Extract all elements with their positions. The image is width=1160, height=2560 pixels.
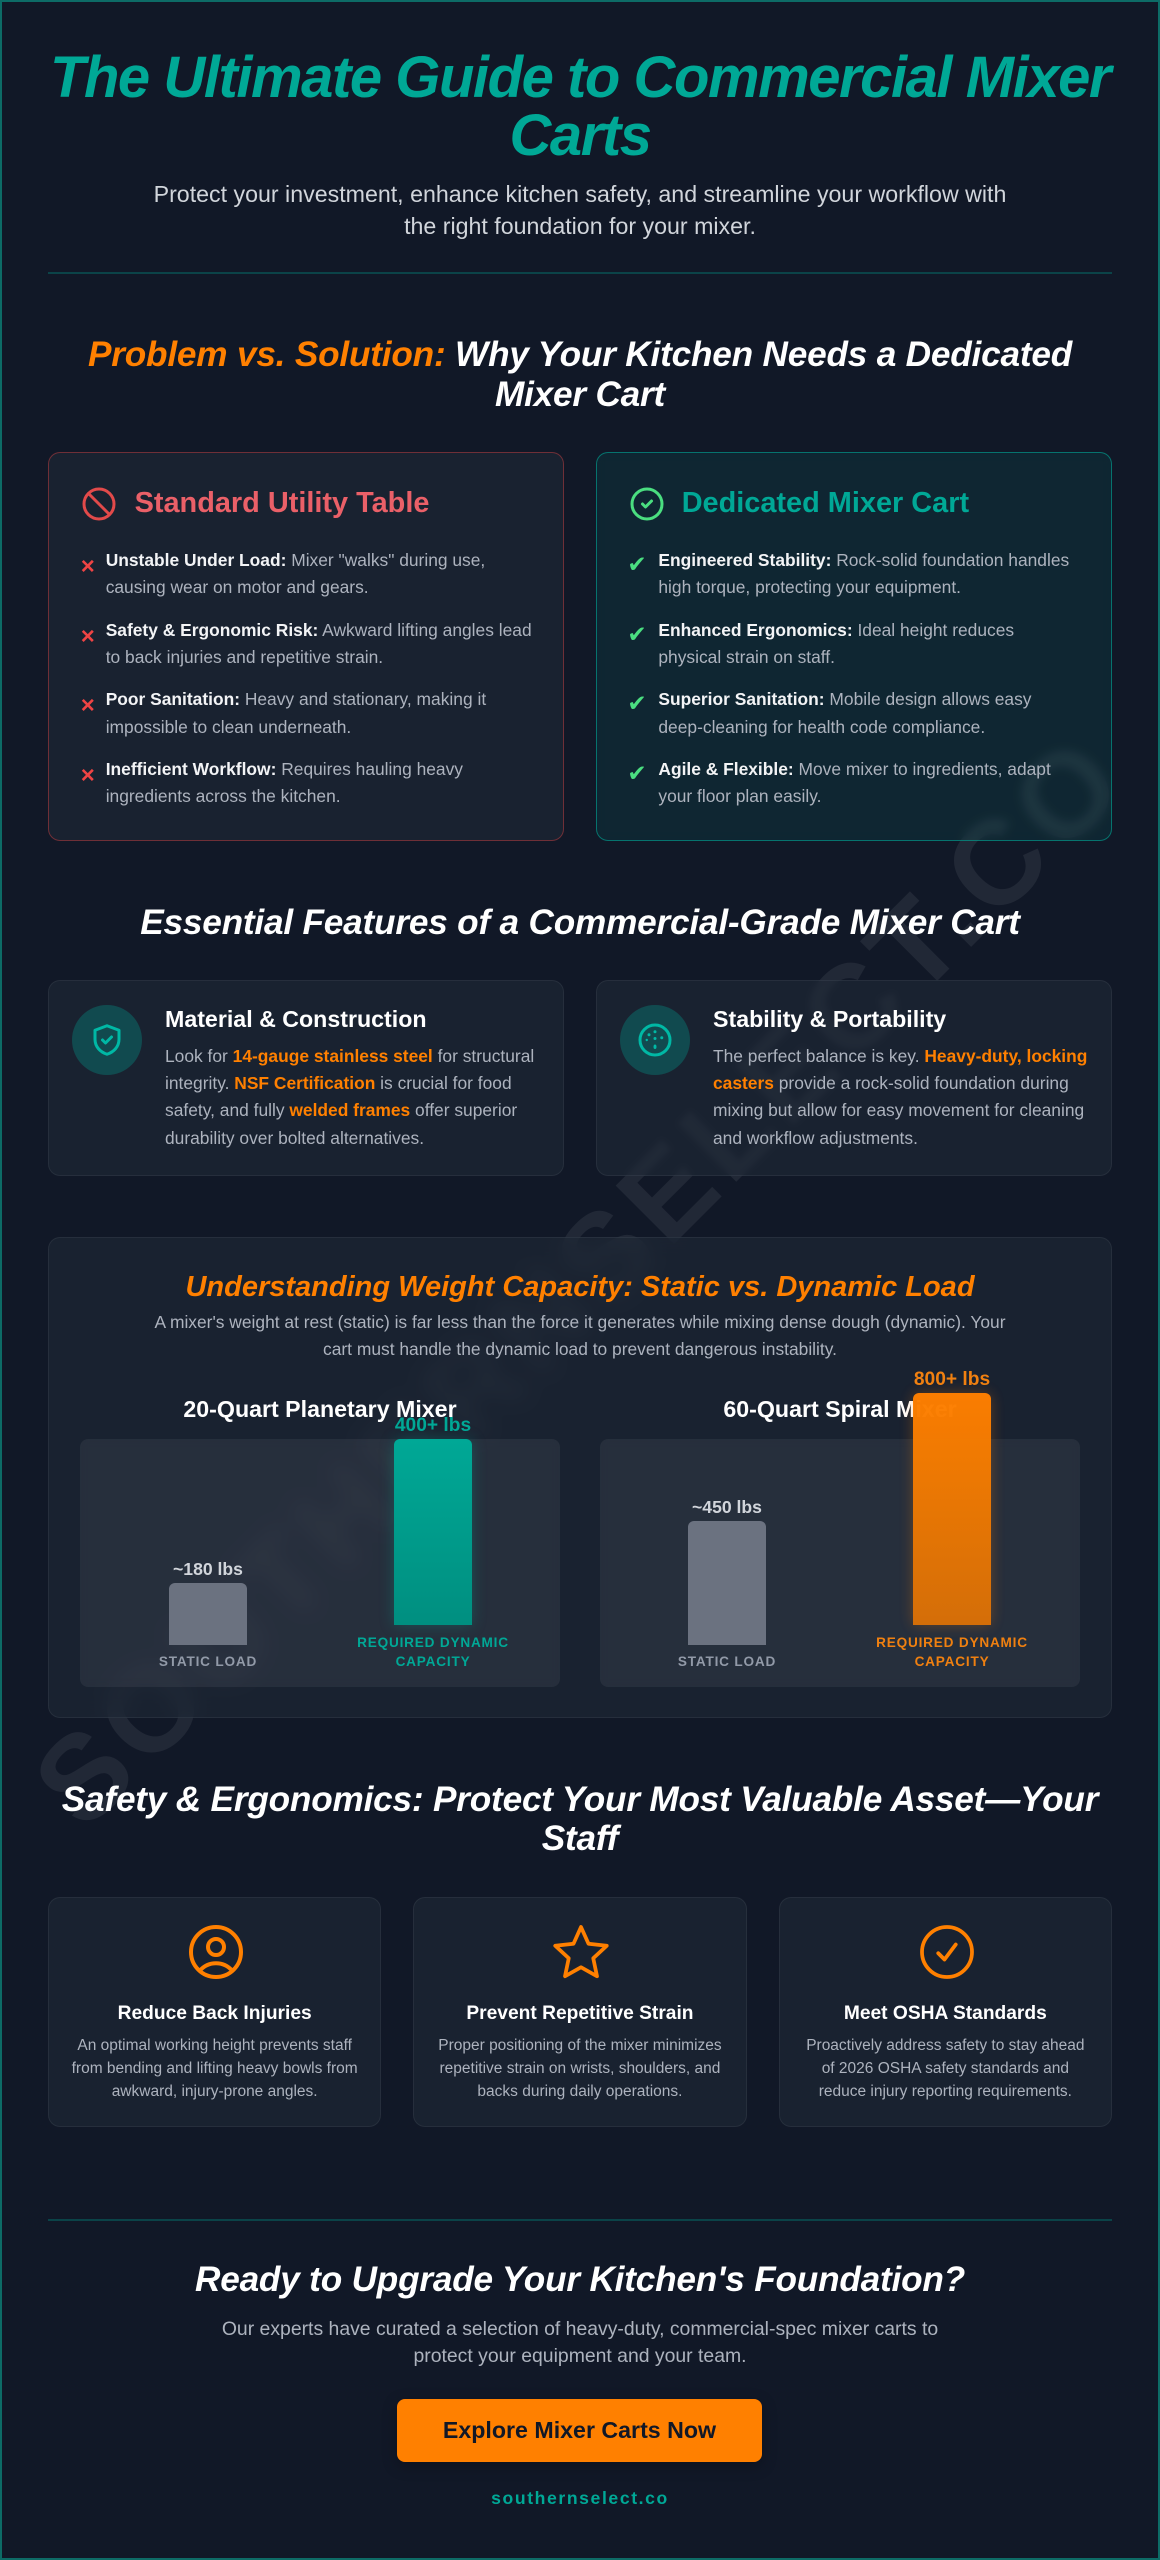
weight capacity heading: Understanding Weight Capacity: Static vs. Dynamic Load xyxy=(185,1271,975,1303)
heading: problem vs solution: Mixer Cart xyxy=(495,374,665,414)
list: solutions: deep-cleaning for health code compliance. xyxy=(658,717,985,737)
heading: safety and ergonomics xyxy=(62,1780,1100,1858)
feature text: mixing but allow for easy movement for cleaning xyxy=(713,1100,1084,1120)
label: dynamic capacity xyxy=(876,1635,1028,1669)
safety card: repetitive strain xyxy=(413,1897,747,2127)
value: dynamic: 400+ lbs xyxy=(395,1415,471,1436)
feature text: and workflow adjustments. xyxy=(713,1128,918,1148)
list: solutions: your floor plan easily. xyxy=(658,786,821,806)
feature text xyxy=(713,1046,1087,1148)
panel heading: Dedicated Mixer Cart xyxy=(682,487,969,519)
feature card: stability xyxy=(596,980,1112,1176)
value: static: ~450 lbs xyxy=(692,1497,762,1517)
call to action text xyxy=(222,2318,938,2367)
heading: essential features: Essential Features of a Commercial-Grade Mixer Cart xyxy=(140,903,1020,942)
card text: Proactively address safety to stay ahead xyxy=(806,2037,1084,2054)
call to action text: Our experts have curated a selection of heavy-duty, commercial-spec mixer carts to xyxy=(222,2318,938,2340)
safety card: osha xyxy=(779,1897,1112,2127)
safety card: back injuries xyxy=(48,1897,381,2127)
panel: dedicated mixer cart: ✔ xyxy=(627,761,647,787)
weight capacity text: A mixer's weight at rest (static) is far less than the force it generates while mixing dense dough (dynamic). Your xyxy=(154,1312,1006,1332)
list: solutions: Engineered Stability: Rock-solid foundation handles xyxy=(658,550,1069,570)
card text: reduce injury reporting requirements. xyxy=(819,2083,1072,2100)
feature text: integrity. NSF Certification is crucial for food xyxy=(165,1073,512,1093)
panel: dedicated mixer cart: ✔ xyxy=(627,622,647,648)
weight capacity text xyxy=(154,1312,1006,1359)
feature text: durability over bolted alternatives. xyxy=(165,1128,424,1148)
icon: user circle xyxy=(189,1925,243,1979)
value: static: ~180 lbs xyxy=(173,1559,243,1579)
icon: ban xyxy=(82,488,116,520)
title: Carts xyxy=(509,102,651,168)
card text: An optimal working height prevents staff xyxy=(77,2037,352,2054)
label: static load: STATIC LOAD xyxy=(159,1654,257,1669)
icon: star xyxy=(553,1925,609,1978)
weight capacity text: cart must handle the dynamic load to prevent dangerous instability. xyxy=(323,1339,837,1359)
feature title: Material & Construction xyxy=(165,1006,427,1032)
heading: safety and ergonomics: Safety & Ergonomics: Protect Your Most Valuable Asset—Your xyxy=(62,1780,1098,1819)
bar chart: 60-quart spiral mixer xyxy=(600,1369,1080,1687)
list: problems: Safety & Ergonomic Risk: Awkward lifting angles lead xyxy=(106,620,532,640)
subtitle: the right foundation for your mixer. xyxy=(404,213,756,239)
title xyxy=(50,44,1114,168)
button xyxy=(397,2399,762,2462)
chart title: 20-Quart Planetary Mixer xyxy=(183,1396,457,1422)
list: problems xyxy=(81,550,532,806)
bar chart: 20-quart planetary mixer xyxy=(80,1396,560,1687)
panel: standard utility table: × xyxy=(81,692,95,719)
feature text xyxy=(165,1046,534,1148)
card text: Proper positioning of the mixer minimizes xyxy=(438,2037,722,2054)
card text xyxy=(806,2037,1084,2100)
list: solutions: high torque, protecting your equipment. xyxy=(658,577,961,597)
subtitle: Protect your investment, enhance kitchen safety, and streamline your workflow with xyxy=(154,181,1006,207)
chart background xyxy=(600,1439,1080,1687)
list: problems: Poor Sanitation: Heavy and stationary, making it xyxy=(106,689,486,709)
icon: shield check xyxy=(72,1005,142,1075)
panel: standard utility table xyxy=(48,452,564,841)
card text: backs during daily operations. xyxy=(477,2083,682,2100)
panel: dedicated mixer cart xyxy=(596,452,1112,841)
card text xyxy=(72,2037,358,2100)
list: problems: Unstable Under Load: Mixer "walks" during use, xyxy=(106,550,485,570)
list: problems: Inefficient Workflow: Requires hauling heavy xyxy=(106,759,463,779)
icon: check circle xyxy=(630,488,664,520)
panel: dedicated mixer cart: ✔ xyxy=(627,691,647,717)
feature text: safety, and fully welded frames offer superior xyxy=(165,1100,517,1120)
chart background xyxy=(80,1439,560,1687)
card text: from bending and lifting heavy bowls from xyxy=(72,2060,358,2077)
card text xyxy=(438,2037,722,2100)
feature text: casters provide a rock-solid foundation during xyxy=(713,1073,1069,1093)
feature text: Look for 14-gauge stainless steel for structural xyxy=(165,1046,534,1066)
heading: call to action: Ready to Upgrade Your Kitchen's Foundation? xyxy=(195,2260,965,2299)
label: dynamic capacity: REQUIRED DYNAMIC xyxy=(357,1635,509,1650)
heading: problem vs solution xyxy=(88,335,1073,414)
list: solutions: Agile & Flexible: Move mixer to ingredients, adapt xyxy=(658,759,1051,779)
list: problems: impossible to clean underneath. xyxy=(106,717,351,737)
list: problems: ingredients across the kitchen. xyxy=(106,786,341,806)
bar: static load xyxy=(688,1521,766,1645)
panel heading: Standard Utility Table xyxy=(135,487,429,519)
list: solutions xyxy=(627,550,1069,806)
icon: caster wheel xyxy=(620,1005,690,1075)
list: solutions: Superior Sanitation: Mobile design allows easy xyxy=(658,689,1031,709)
panel: standard utility table: × xyxy=(81,553,95,580)
card text: of 2026 OSHA safety standards and xyxy=(822,2060,1069,2077)
list: problems: to back injuries and repetitive strain. xyxy=(106,647,383,667)
subtitle xyxy=(154,181,1006,239)
bar: dynamic capacity xyxy=(394,1439,472,1625)
card title: Meet OSHA Standards xyxy=(844,2003,1047,2024)
button: Explore Mixer Carts Now xyxy=(443,2417,716,2443)
watermark: SOUTHERNSELECT.CO xyxy=(8,708,1152,1852)
card text: repetitive strain on wrists, shoulders, and xyxy=(440,2060,720,2077)
label: static load: STATIC LOAD xyxy=(678,1654,776,1669)
footer link: southernselect.co xyxy=(491,2488,669,2508)
label: dynamic capacity: CAPACITY xyxy=(396,1654,470,1669)
title: The Ultimate Guide to Commercial Mixer xyxy=(50,44,1110,110)
icon: check circle xyxy=(920,1925,974,1979)
panel: weight capacity xyxy=(48,1237,1112,1718)
bar: static load xyxy=(169,1583,247,1645)
label: dynamic capacity: CAPACITY xyxy=(915,1654,989,1669)
card text: awkward, injury-prone angles. xyxy=(112,2083,318,2100)
list: solutions: Enhanced Ergonomics: Ideal height reduces xyxy=(658,620,1014,640)
heading: problem vs solution: Problem vs. Solution: Why Your Kitchen Needs a Dedicated xyxy=(88,335,1072,374)
call to action text: protect your equipment and your team. xyxy=(413,2345,747,2367)
chart title: 60-Quart Spiral Mixer xyxy=(723,1396,957,1422)
list: solutions: physical strain on staff. xyxy=(658,647,835,667)
value: dynamic: 800+ lbs xyxy=(914,1369,990,1390)
feature text: The perfect balance is key. Heavy-duty, locking xyxy=(713,1046,1087,1066)
list: problems: causing wear on motor and gears. xyxy=(106,577,369,597)
panel: dedicated mixer cart: ✔ xyxy=(627,552,647,578)
card title: Reduce Back Injuries xyxy=(118,2003,312,2024)
card title: Prevent Repetitive Strain xyxy=(466,2003,694,2024)
bar: dynamic capacity xyxy=(913,1393,991,1625)
label: dynamic capacity xyxy=(357,1635,509,1669)
feature title: Stability & Portability xyxy=(713,1006,946,1032)
feature card: material xyxy=(48,980,564,1176)
heading: safety and ergonomics: Staff xyxy=(542,1819,618,1858)
panel: standard utility table: × xyxy=(81,762,95,789)
panel: standard utility table: × xyxy=(81,623,95,650)
label: dynamic capacity: REQUIRED DYNAMIC xyxy=(876,1635,1028,1650)
